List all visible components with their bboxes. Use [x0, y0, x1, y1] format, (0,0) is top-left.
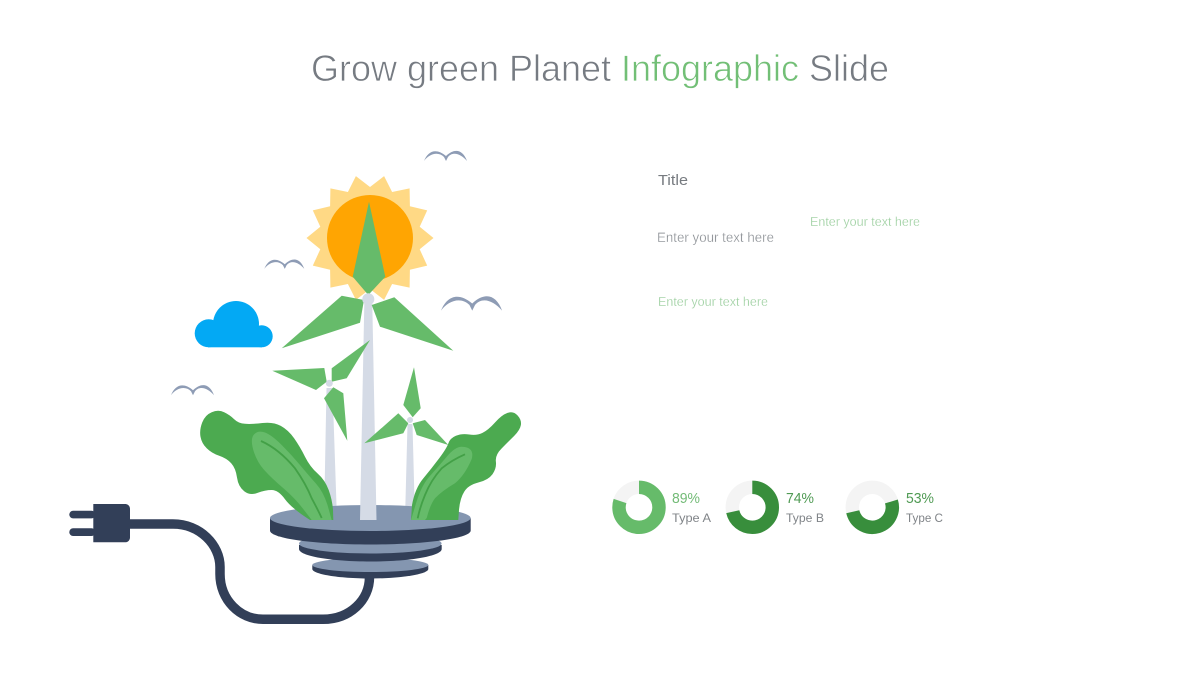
pot top disc — [270, 505, 471, 544]
icon: plug — [69, 504, 130, 542]
icon: sun — [306, 176, 434, 300]
turbine hub: small — [407, 417, 413, 423]
value: 89%: 89% — [672, 491, 700, 507]
icon: bird right — [441, 296, 502, 311]
tower: large turbine — [360, 304, 376, 520]
icon: bird top — [424, 151, 467, 161]
value: 74%: 74% — [786, 491, 814, 507]
text block: title label: Title — [658, 172, 688, 189]
icon: bird lower left — [171, 385, 214, 395]
value: 53%: 53% — [906, 491, 934, 507]
turbine blades: small — [364, 367, 448, 445]
label: Type C: Type C — [906, 513, 943, 525]
leaf left — [200, 411, 333, 520]
turbine hub: large — [362, 293, 374, 305]
label: Type A: Type A — [672, 513, 711, 525]
donut chart: Type A — [619, 487, 711, 527]
tower: small turbine — [405, 424, 415, 520]
illustration: green energy plant — [69, 151, 521, 619]
label: Type B: Type B — [786, 513, 824, 525]
turbine blades: large — [282, 202, 453, 351]
text block: green text left: Enter your text here — [658, 295, 768, 309]
icon: cloud — [195, 301, 273, 347]
leaf right — [411, 412, 521, 520]
turbine hub: middle — [326, 380, 333, 387]
text block: green text right: Enter your text here — [810, 215, 920, 229]
plant pot stack — [270, 505, 471, 578]
tower: middle turbine — [324, 388, 337, 520]
donut chart: Type C — [847, 482, 943, 532]
donut chart: Type B — [732, 487, 824, 527]
power cord — [128, 524, 370, 619]
icon: bird middle left — [264, 260, 304, 269]
pot middle disc — [299, 534, 442, 562]
turbine blades: middle — [272, 340, 370, 441]
text block: grey text: Enter your text here — [657, 229, 774, 245]
title: Grow green Planet Infographic Slide — [311, 48, 889, 89]
pot lower disc — [312, 558, 428, 578]
